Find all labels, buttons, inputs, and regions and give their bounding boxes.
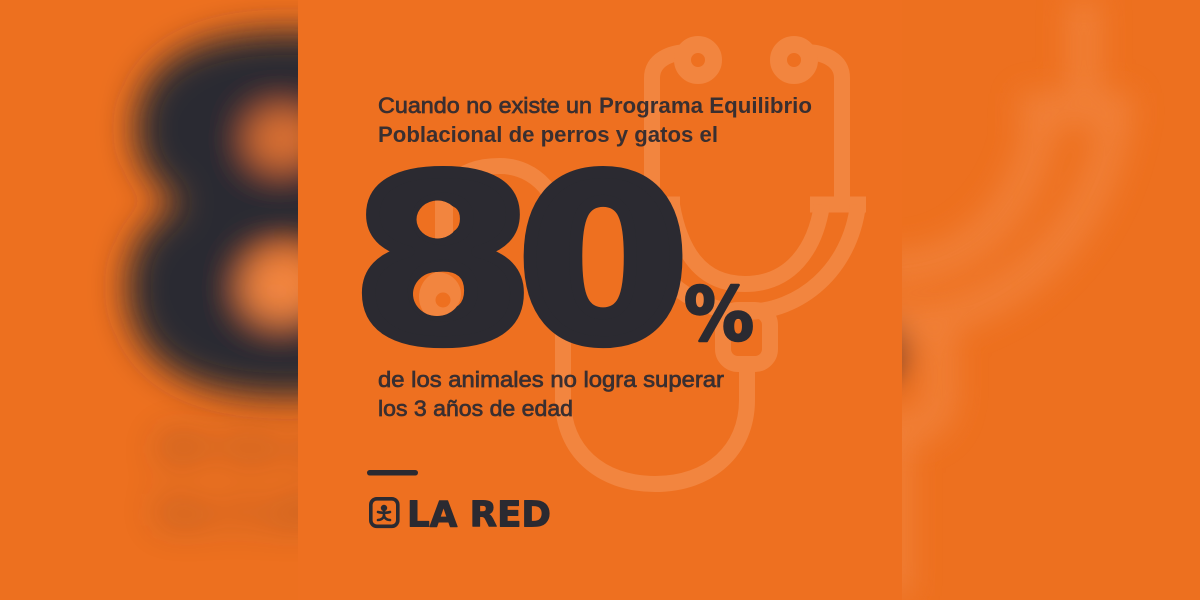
- blurred backdrop: left side: [100, 4, 298, 540]
- heading text: [378, 93, 812, 147]
- big number 80: [362, 166, 682, 348]
- panel: central square: [362, 36, 866, 528]
- percent sign: %: [684, 272, 754, 358]
- blurred backdrop: right side: [902, 0, 1136, 596]
- short rule: [367, 470, 418, 476]
- logo wordmark: LA RED: [407, 494, 551, 536]
- big number 80: 8: [353, 131, 533, 393]
- icon: logo mark: [371, 499, 398, 526]
- blurred backdrop: left side: los 3 años de edad: [156, 487, 546, 536]
- upper counter of the 8 showing the stethoscope tube: [416, 200, 455, 238]
- blurred backdrop: left side: de los animales no logra superar: [156, 421, 848, 470]
- subtext: los 3 años de edad: [378, 396, 573, 421]
- subtext: de los animales no logra superar: [378, 367, 724, 392]
- heading text: Cuando no existe un: [378, 93, 592, 118]
- blurred backdrop: right side: %: [768, 243, 908, 415]
- logo: La Red: [371, 494, 551, 536]
- subtext: [378, 367, 724, 421]
- big number 80: 0: [518, 131, 688, 393]
- heading text: Poblacional de perros y gatos el: [378, 122, 718, 147]
- lower counter of the 8 showing the chest piece: [413, 272, 461, 316]
- icon: stethoscope watermark: [452, 44, 866, 484]
- heading text: Programa Equilibrio: [599, 93, 812, 118]
